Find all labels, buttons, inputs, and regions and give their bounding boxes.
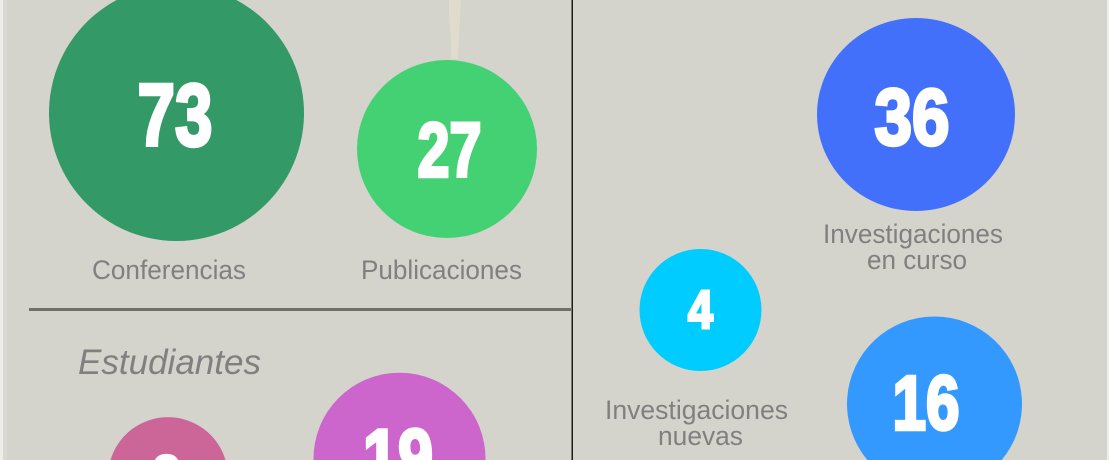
metric: Investigaciones nuevas: 4 [688, 280, 713, 340]
metric: Investigaciones nuevas: nuevas [658, 421, 743, 451]
metric: blue circle 16 [847, 316, 1022, 460]
metric: students, pink circle [110, 417, 226, 460]
metric: Publicaciones: 27 [418, 108, 482, 194]
rope decoration [449, 0, 461, 59]
metric: students, purple circle [314, 373, 485, 460]
metric: Investigaciones nuevas: Investigaciones [605, 395, 788, 425]
metric: Publicaciones [357, 60, 537, 285]
metric: Investigaciones en curso: 36 [874, 72, 950, 162]
metric: Conferencias: 73 [138, 66, 212, 164]
metric: Investigaciones en curso: Investigaciones [823, 219, 1003, 249]
metric: Conferencias [49, 0, 304, 285]
metric: Publicaciones: Publicaciones [361, 255, 522, 285]
metric: Investigaciones en curso: en curso [867, 245, 967, 275]
metric: Conferencias: Conferencias [92, 255, 246, 285]
number: blue circle 16: 16 [892, 360, 960, 446]
metric: Investigaciones en curso [817, 18, 1015, 275]
heading: Estudiantes: Estudiantes [78, 343, 261, 382]
metric: Investigaciones nuevas [605, 249, 788, 451]
